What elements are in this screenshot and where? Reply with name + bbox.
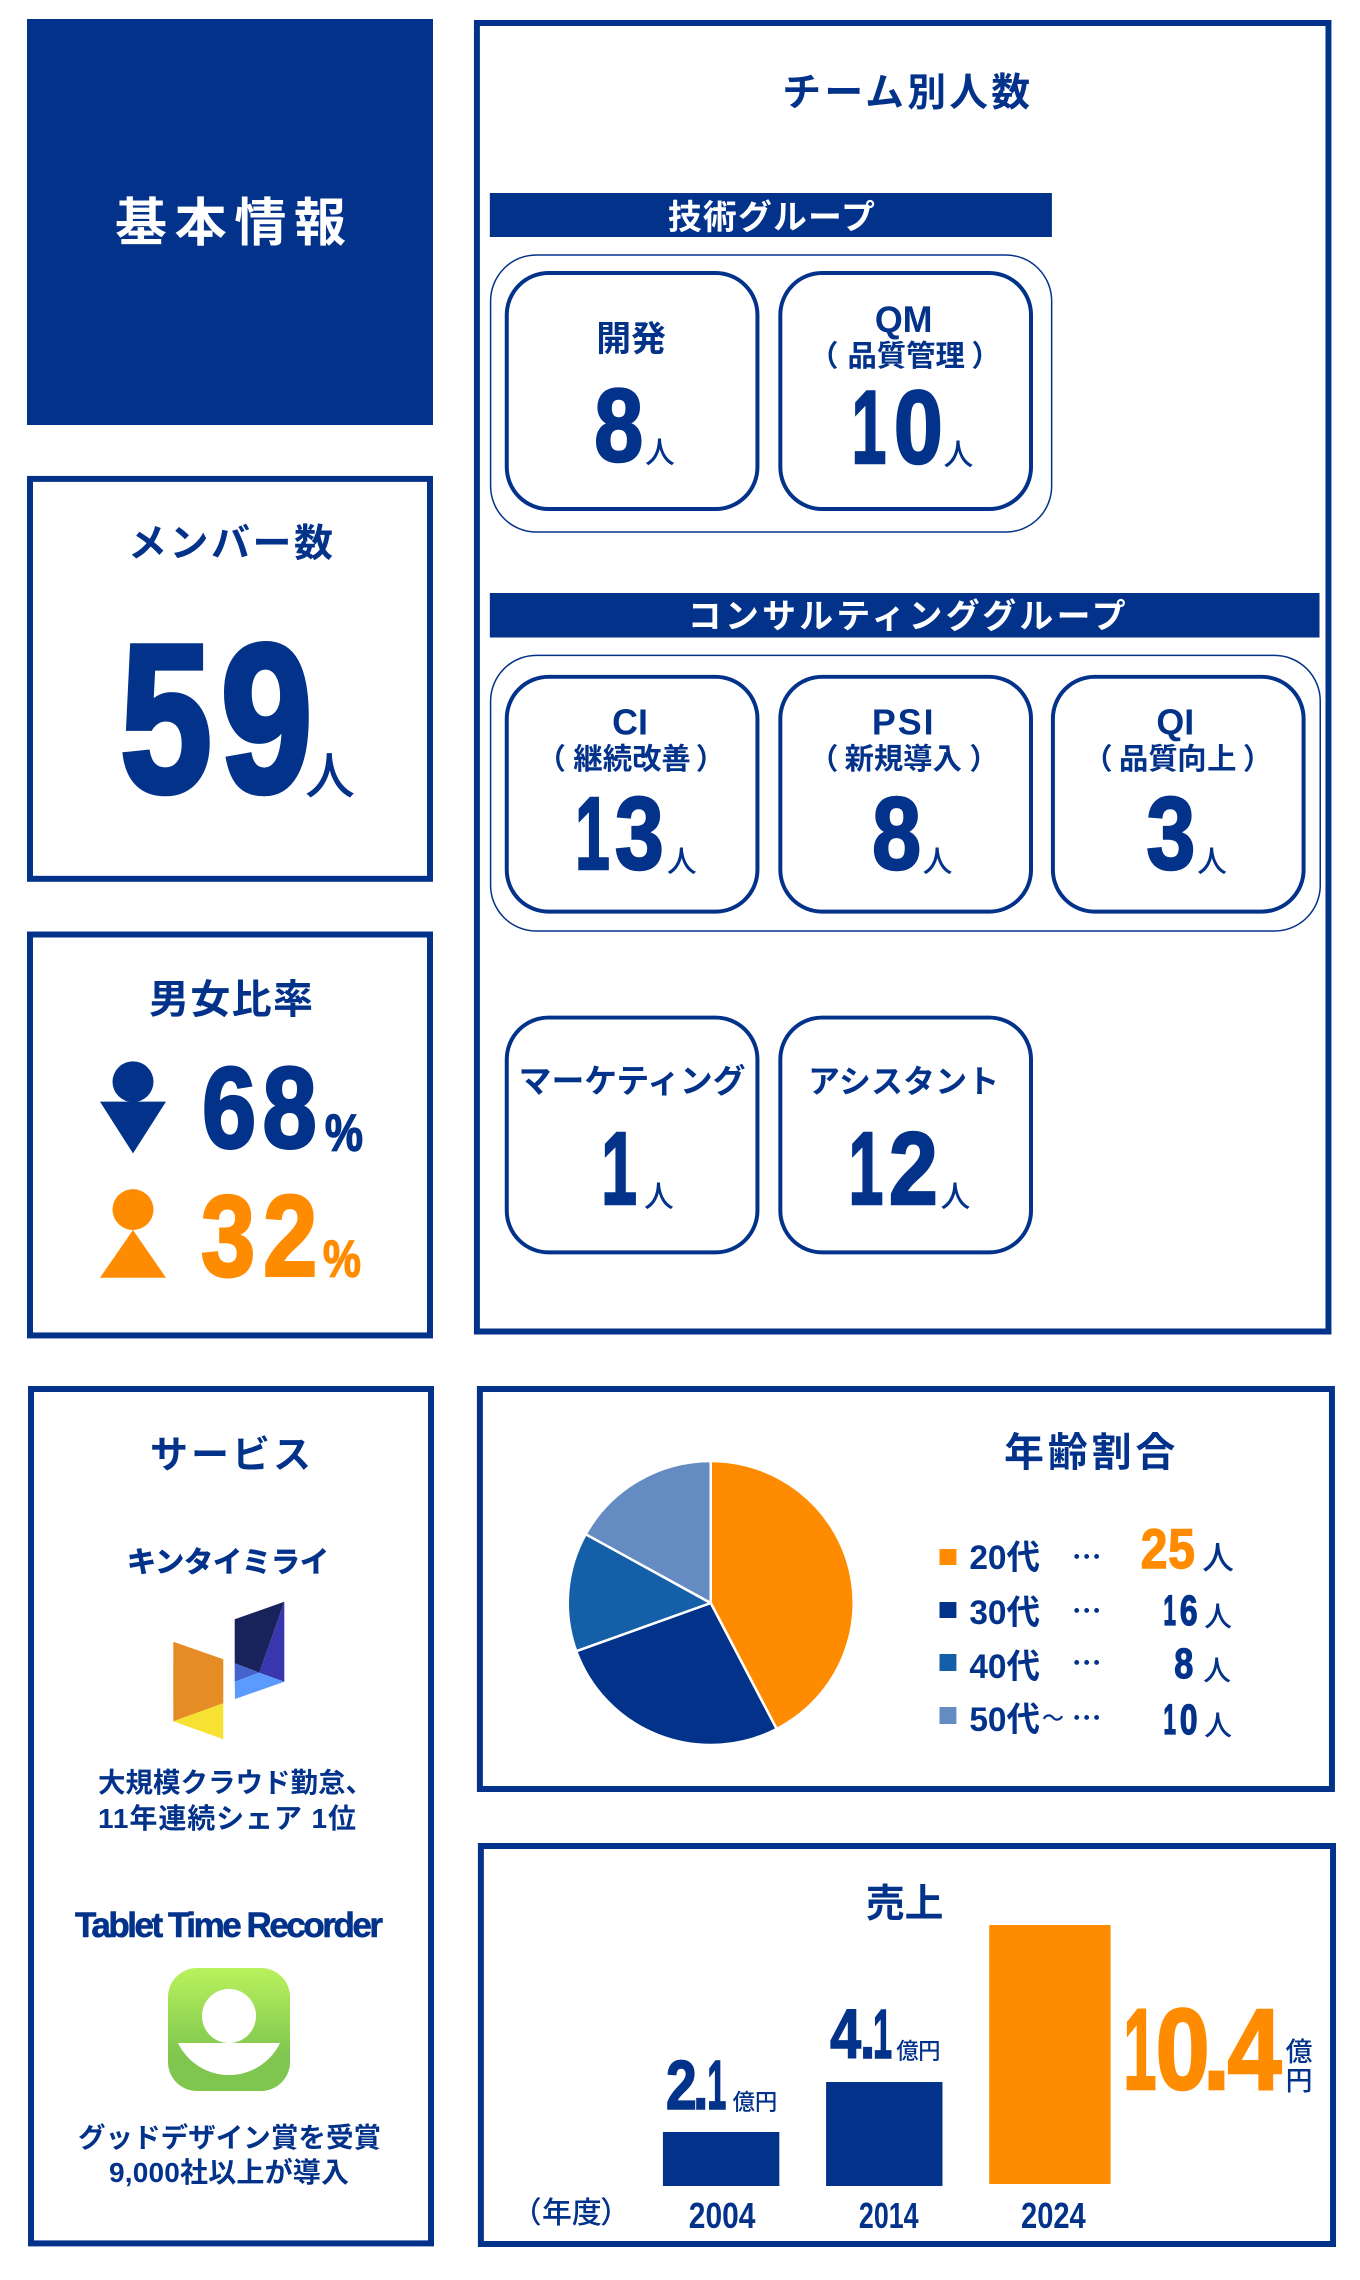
number: female 32 percent: 32 [201, 1171, 317, 1301]
description: Tablet Time Recorder: グッドデザイン賞を受賞 [78, 2122, 381, 2153]
unit: percent: % [325, 1105, 363, 1162]
value: 10.4 oku yen: . [1203, 1985, 1230, 2114]
card: new adoption: （新規導入） [809, 743, 999, 776]
number: 59 people: 59 [120, 601, 313, 837]
legend row: 40s: 8 [1174, 1640, 1193, 1688]
panel: gender ratio [30, 935, 430, 1335]
legend row: 20s: 人 [1202, 1540, 1234, 1576]
heading: services: サービス [150, 1435, 311, 1477]
legend row: 40s [939, 1639, 1231, 1688]
legend row: 40s: … [1072, 1639, 1102, 1683]
group header: consulting group [490, 593, 1320, 638]
value: 10.4 oku yen: 4 [1228, 1985, 1282, 2114]
bar: 2004 [663, 2132, 779, 2186]
legend row: 40s: 40代 [969, 1648, 1040, 1686]
card: assistant: 1 [849, 1111, 883, 1227]
legend row: 20s [939, 1519, 1234, 1581]
value: 4.1 oku yen: . [860, 1996, 875, 2073]
panel: headcount by team [477, 23, 1328, 1332]
card: continuous improvement [507, 677, 757, 912]
legend row: 20s: 20代 [969, 1539, 1040, 1577]
pie chart: age distribution [568, 1461, 854, 1745]
panel: member count [30, 479, 430, 879]
card: assistant: アシスタント [808, 1064, 999, 1100]
value: 10.4 oku yen: 億円 [1286, 2037, 1313, 2096]
legend row: 50s and over: 50代 [969, 1701, 1040, 1739]
axis label: 2014: 2014 [859, 2196, 919, 2236]
card: quality improvement: QI [1156, 703, 1194, 743]
legend row: 40s: 人 [1203, 1655, 1231, 1686]
card: continuous improvement: 3 [615, 776, 664, 891]
unit: people: 人 [305, 749, 355, 805]
value: 2.1 oku yen: 億円 [733, 2090, 777, 2115]
card: new adoption: 人 [923, 846, 953, 879]
panel: basic information title [27, 19, 433, 425]
card: continuous improvement: 1 [575, 776, 610, 891]
group header: consulting group: コンサルティンググループ [688, 598, 1126, 636]
icon: female [100, 1189, 166, 1278]
card: development: 開発 [596, 320, 666, 359]
panel: age distribution [480, 1389, 1332, 1789]
legend row: 30s: … [1072, 1587, 1102, 1631]
legend row: 30s: 1 [1163, 1588, 1176, 1635]
card: assistant [780, 1018, 1031, 1252]
card: quality management [780, 273, 1031, 509]
card: continuous improvement: 人 [667, 846, 697, 879]
panel: sales [481, 1846, 1333, 2244]
group frame: consulting group [491, 655, 1320, 931]
group header: technology group: 技術グループ [668, 199, 875, 237]
card: quality improvement: （品質向上） [1083, 743, 1272, 776]
value: 2.1 oku yen [666, 2047, 777, 2124]
description: KintaiMirai [98, 1767, 373, 1834]
value: 4.1 oku yen: 1 [873, 1996, 892, 2073]
legend row: 50s and over: … [1072, 1694, 1102, 1738]
panel: services [31, 1389, 431, 2243]
unit: percent: % [323, 1231, 361, 1289]
value: 10.4 oku yen: 0 [1156, 1985, 1210, 2114]
heading: members: メンバー数 [128, 523, 333, 565]
card: new adoption: PSI [872, 703, 934, 743]
value: 2.1 oku yen: 2 [666, 2047, 697, 2124]
icon: KintaiMirai logo [173, 1602, 284, 1739]
value: 10.4 oku yen: 1 [1124, 1985, 1157, 2114]
card: assistant: 人 [940, 1181, 970, 1214]
heading: sales: 売上 [866, 1883, 943, 1926]
legend row: 30s [939, 1587, 1232, 1635]
value: 2.1 oku yen: . [693, 2047, 708, 2124]
card: development: 8 [594, 368, 643, 484]
card: marketing: マーケティング [519, 1063, 746, 1100]
icon: male [100, 1061, 166, 1153]
bar: 2024 [989, 1925, 1111, 2184]
bar: 2014 [826, 2082, 942, 2186]
card: development [507, 273, 757, 509]
heading: gender ratio: 男女比率 [149, 978, 313, 1022]
heading: basic information: 基本情報 [115, 195, 346, 253]
description: KintaiMirai: 11年連続シェア 1位 [98, 1803, 356, 1834]
legend row: 20s: … [1072, 1533, 1102, 1577]
card: assistant: 2 [889, 1111, 938, 1227]
group frame: technology group [491, 255, 1052, 532]
number: male 68 percent: 68 [202, 1043, 317, 1172]
service name: Tablet Time Recorder: Tablet Time Recorder [75, 1906, 383, 1945]
card: marketing [507, 1018, 757, 1252]
card: marketing: 人 [644, 1181, 674, 1214]
axis label: 2024: 2024 [1021, 2196, 1086, 2236]
legend row: 50s and over: 1 [1163, 1697, 1176, 1744]
card: quality management: 人 [943, 439, 973, 472]
card: continuous improvement: （継続改善） [537, 743, 725, 776]
value: 4.1 oku yen [830, 1996, 940, 2073]
legend row: 30s: 人 [1204, 1601, 1232, 1632]
card: quality improvement: 人 [1197, 846, 1227, 879]
card: quality management: QM [875, 299, 933, 340]
icon: Tablet Time Recorder app [168, 1968, 290, 2091]
heading: age distribution: 年齢割合 [1004, 1431, 1175, 1475]
card: continuous improvement: CI [612, 703, 648, 743]
card: quality management: 0 [894, 370, 943, 486]
group header: technology group [490, 193, 1052, 237]
description: Tablet Time Recorder [78, 2122, 381, 2188]
legend row: 30s: 6 [1180, 1588, 1198, 1635]
value: 4.1 oku yen: 4 [830, 1996, 861, 2073]
heading: headcount by team: チーム別人数 [782, 72, 1030, 115]
value: 10.4 oku yen [1124, 1985, 1313, 2114]
card: quality improvement: 3 [1146, 776, 1195, 891]
legend row: 20s: 25 [1141, 1519, 1195, 1581]
card: quality improvement [1053, 677, 1304, 912]
card: quality management: （品質管理） [809, 340, 1001, 373]
value: 4.1 oku yen: 億円 [896, 2039, 940, 2064]
card: new adoption: 8 [872, 776, 921, 891]
description: Tablet Time Recorder: 9,000社以上が導入 [109, 2156, 349, 2188]
axis label: 2004: 2004 [689, 2196, 755, 2236]
service name: KintaiMirai: キンタイミライ [127, 1546, 329, 1579]
value: 2.1 oku yen: 1 [707, 2047, 726, 2124]
legend row: 50s and over: 0 [1180, 1697, 1198, 1744]
card: new adoption [780, 677, 1031, 912]
legend row: 30s: 30代 [969, 1594, 1040, 1632]
axis label: fiscal year: （年度） [512, 2197, 630, 2230]
description: KintaiMirai: 大規模クラウド勤怠、 [98, 1767, 373, 1798]
card: development: 人 [645, 437, 675, 470]
legend row: 50s and over [939, 1694, 1232, 1744]
legend row: 50s and over: 人 [1204, 1710, 1232, 1741]
card: marketing: 1 [601, 1112, 637, 1227]
legend row: 50s and over: ～ [1042, 1706, 1064, 1731]
card: quality management: 1 [852, 370, 886, 486]
